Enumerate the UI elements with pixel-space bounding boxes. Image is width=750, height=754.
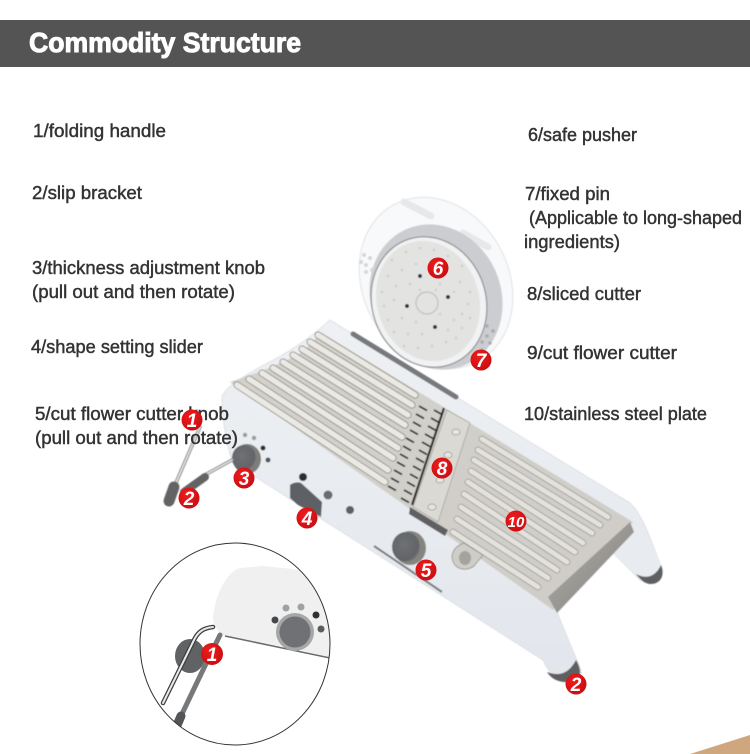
number badge 6: [428, 258, 448, 280]
label 5: (pull out and then rotate): [35, 427, 238, 448]
label 1: 1/folding handle: [33, 120, 166, 141]
number badge 1: [182, 410, 202, 432]
number badge 8: 8: [437, 459, 448, 480]
sliced cutter blade: [412, 408, 470, 522]
number badge 1 inset: 1: [207, 645, 217, 666]
label 8: 8/sliced cutter: [527, 283, 641, 304]
number badge 3: 3: [239, 469, 250, 490]
number badge 1 inset: [201, 643, 223, 666]
inset knob: [272, 604, 324, 651]
header banner: [0, 20, 750, 67]
label 9: 9/cut flower cutter: [527, 342, 677, 363]
number badge 6: 6: [433, 259, 444, 280]
front slot line: [374, 546, 442, 592]
label 10: 10/stainless steel plate: [524, 403, 707, 424]
front foot cap: [547, 660, 580, 682]
label 5: [35, 403, 238, 448]
rear foot cap: [636, 565, 663, 584]
steel pin socket: [452, 543, 483, 569]
knob 3: [232, 444, 261, 474]
label 3: (pull out and then rotate): [32, 281, 235, 302]
knob 5: [392, 531, 426, 565]
number badge 5: [416, 560, 436, 582]
number badge 7: 7: [476, 351, 488, 372]
number badge 1: 1: [187, 411, 197, 432]
number badge 2 front foot: 2: [570, 675, 582, 696]
number badge 4: [296, 508, 318, 530]
number badge 5: 5: [421, 561, 432, 582]
label 3: 3/thickness adjustment knob: [32, 257, 265, 278]
transparent safe pusher disc: [330, 170, 542, 396]
number badge 3: [234, 468, 254, 490]
inset circle: folding handle detail: [140, 542, 330, 746]
label 4: 4/shape setting slider: [31, 336, 203, 357]
label 5: 5/cut flower cutter knob: [35, 403, 229, 424]
number badge 2: 2: [183, 489, 195, 510]
blade base bar: [409, 507, 448, 536]
stainless steel plate: [230, 332, 633, 610]
title: Commodity Structure: [29, 27, 301, 58]
indicator dots: [243, 433, 354, 514]
number badge 8: [432, 458, 452, 480]
label 2: 2/slip bracket: [32, 182, 142, 203]
right plate slots: [453, 439, 608, 587]
inset body cap: [213, 566, 335, 659]
label 7: ingredients): [524, 231, 620, 252]
number badge 10: [506, 510, 526, 532]
product: mandoline slicer: [169, 170, 663, 682]
label 6: 6/safe pusher: [528, 124, 637, 145]
number badge 7: [470, 350, 492, 372]
number badge 4: 4: [301, 509, 313, 530]
rear leg inner shade: [613, 526, 663, 583]
slicing slits: [388, 406, 442, 502]
number badge 10: 10: [508, 514, 525, 531]
inset dark grip: [175, 639, 205, 673]
folding bracket: [169, 427, 232, 501]
pusher rail: [353, 334, 456, 397]
wooden surface corner: [690, 735, 750, 754]
label 7: [524, 183, 742, 252]
back rail of the body: [222, 320, 663, 682]
label 3: [32, 257, 265, 302]
number badge 2: [178, 488, 200, 510]
label 7: (Applicable to long-shaped: [529, 207, 742, 228]
label 7: 7/fixed pin: [525, 183, 610, 204]
left plate slots: [237, 335, 415, 482]
inset rods: [163, 627, 220, 730]
number badge 2 front foot: [566, 674, 586, 696]
slider 4: [290, 482, 322, 517]
plate end band: [548, 522, 634, 613]
